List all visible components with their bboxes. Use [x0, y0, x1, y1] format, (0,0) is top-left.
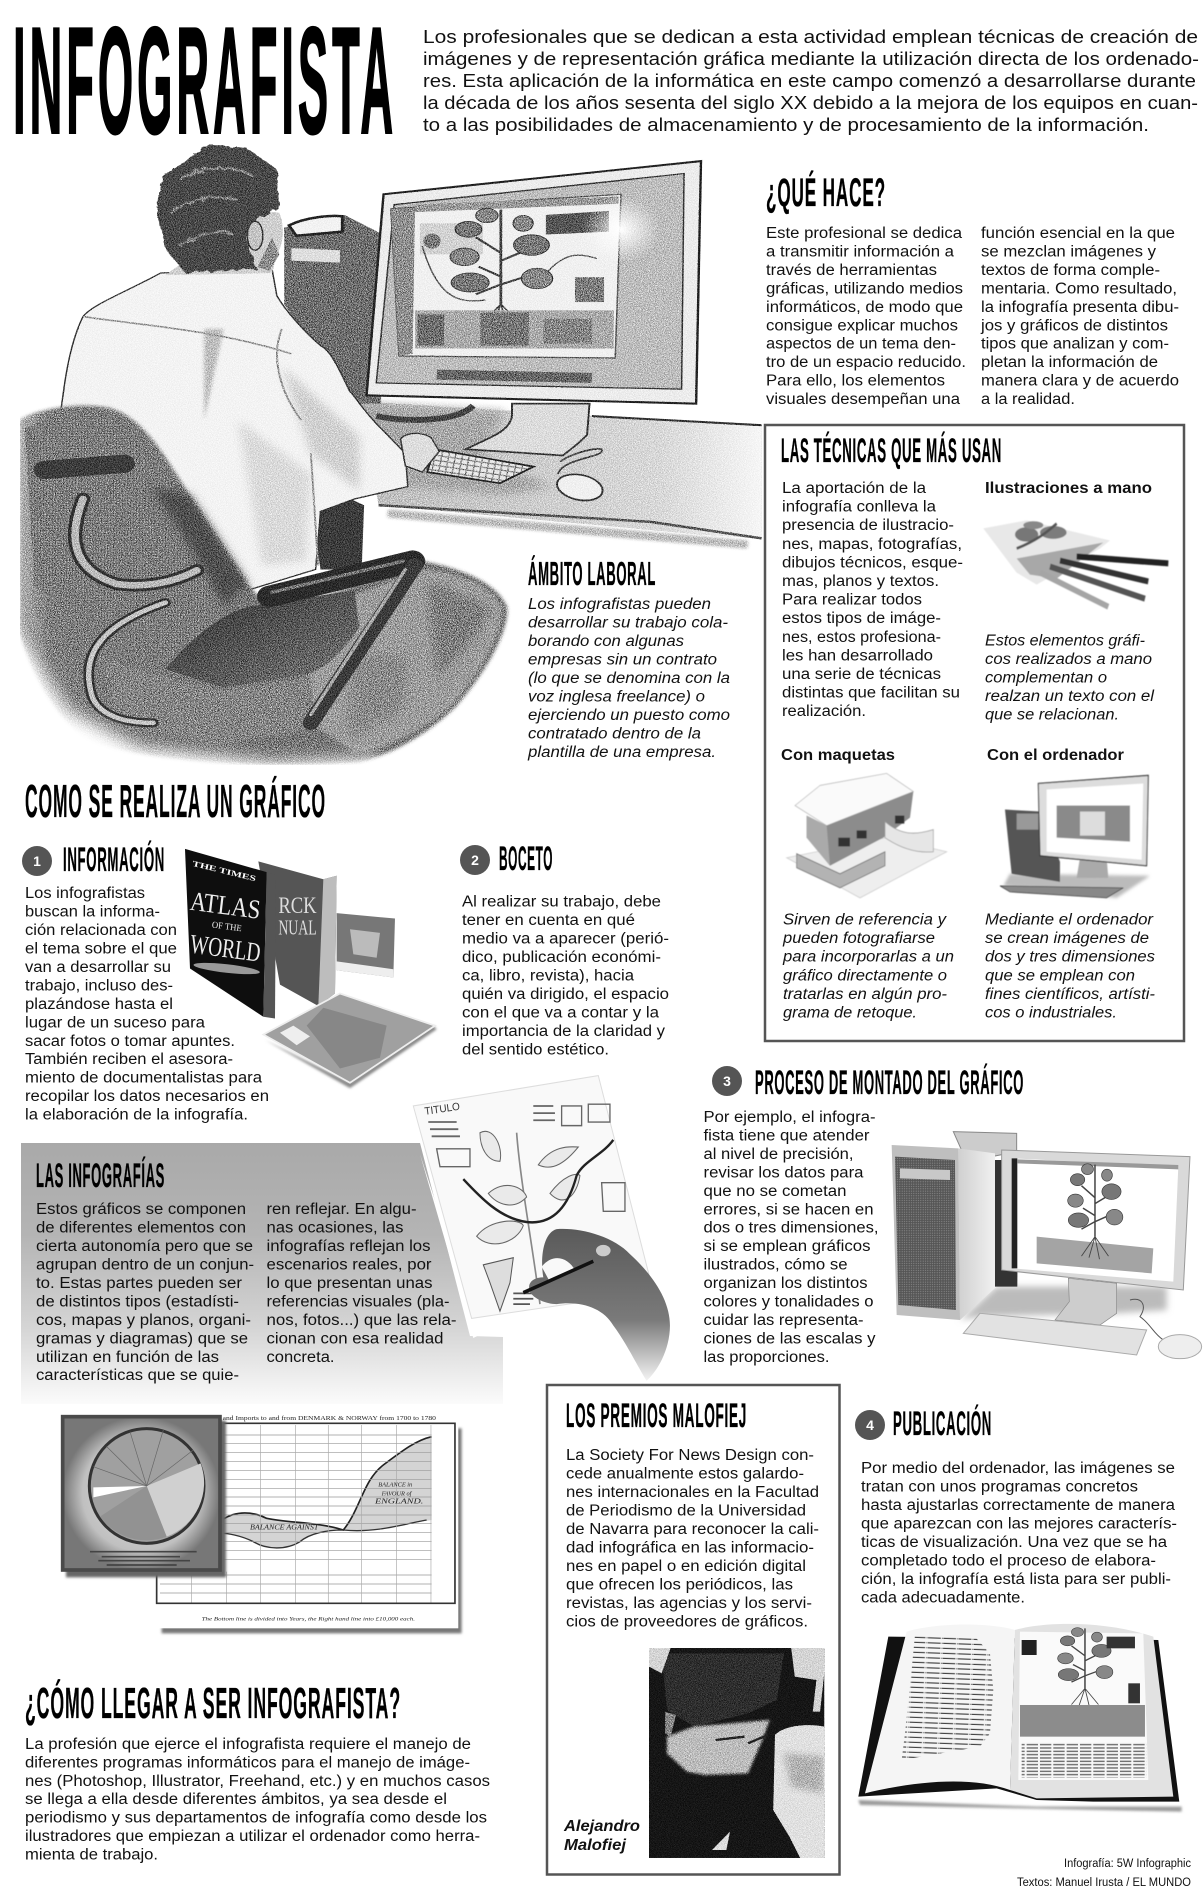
text: con el ordenador: dos y tres dimensiones	[985, 949, 1155, 966]
text block: que hace: función esencial en la que	[981, 225, 1175, 242]
text: las infografias: nos, fotos...) que las rela-	[266, 1312, 456, 1329]
book: manual: RCK	[278, 893, 317, 918]
text: las infografias: cierta autonomía pero que se	[36, 1238, 253, 1255]
step 3 text: errores, si se hacen en	[704, 1201, 874, 1218]
man head	[157, 145, 283, 275]
text: las infografias	[36, 1201, 456, 1384]
text: como llegar a ser infografista: nes (Photoshop, Illustrator, Freehand, etc.) y en muchos casos	[25, 1773, 490, 1790]
step 1 number	[22, 846, 52, 876]
text: las infografias: to. Estas partes pueden ser	[36, 1275, 242, 1292]
text: las infografias: cionan con esa realidad	[266, 1330, 444, 1348]
step 1 text: ción relacionada con	[25, 922, 177, 939]
text: tecnicas intro: nes, mapas, fotografías,	[782, 536, 962, 553]
text: los premios malofiej: La Society For News Design con-	[566, 1447, 814, 1464]
text: las infografias: gramas y diagramas) que se	[36, 1330, 248, 1348]
text: ¿CÓMO LLEGAR A SER INFOGRAFISTA?	[25, 1678, 401, 1728]
step 1 text: Los infografistas	[25, 885, 145, 902]
text: ambito laboral: contratado dentro de la	[528, 726, 701, 742]
text: las infografias: concreta.	[266, 1349, 334, 1366]
text: las infografias: de diferentes elementos con	[36, 1220, 246, 1236]
text: ilustraciones a mano: cos realizados a mano	[985, 651, 1152, 668]
illustration: man working at computer	[0, 145, 762, 793]
text: los premios malofiej	[566, 1447, 819, 1630]
intro text: res. Esta aplicación de la informática en este campo comenzó a desarrollarse durante	[423, 71, 1196, 91]
step 3 text: si se emplean gráficos	[704, 1238, 871, 1255]
text: como llegar a ser infografista: se llega a ella desde diferentes ámbitos, ya sea desde el	[25, 1791, 447, 1808]
text block: que hace: la infografía presenta dibu-	[981, 299, 1179, 316]
step 4 text: Por medio del ordenador, las imágenes se	[861, 1460, 1175, 1477]
text: como llegar a ser infografista: diferentes programas informáticos para el manejo de imáge-	[25, 1754, 470, 1771]
step 4 text: hasta ajustarlas correctamente de manera	[861, 1497, 1175, 1514]
text block: que hace: mentaria. Como resultado,	[981, 280, 1177, 297]
step 1 text	[25, 885, 269, 1124]
step 1 text: buscan la informa-	[25, 904, 160, 920]
text: tecnicas intro: dibujos técnicos, esque-	[782, 554, 963, 571]
step 2 text: dico, publicación económi-	[462, 949, 661, 966]
step 1 text: sacar fotos o tomar apuntes.	[25, 1033, 235, 1050]
text: las infografias: infografías reflejan los	[266, 1238, 431, 1255]
step 1 text: la elaboración de la infografía.	[25, 1107, 248, 1124]
textured drawing	[20, 145, 762, 765]
text: con el ordenador: fines científicos, artísti-	[985, 986, 1155, 1003]
step 2 text: tener en cuenta en qué	[462, 912, 635, 929]
text: tecnicas intro: La aportación de la	[782, 480, 926, 497]
step 1 text: trabajo, incluso des-	[25, 977, 173, 994]
photo caption: Malofiej	[564, 1837, 627, 1854]
image: books and map	[185, 849, 437, 1088]
brochure	[337, 913, 395, 977]
text: tecnicas intro: Para realizar todos	[782, 592, 922, 609]
text: los premios malofiej: cios de proveedores de gráficos.	[566, 1614, 808, 1630]
text: las infografias: agrupan dentro de un conjun-	[36, 1256, 254, 1274]
panel: las tecnicas que mas usan	[765, 425, 1184, 1041]
step 1 text: plazándose hasta el	[25, 996, 173, 1013]
image: sketch sheet and hand	[413, 1076, 670, 1381]
text: como llegar a ser infografista: La profesión que ejerce el infografista requiere el manejo de	[25, 1736, 471, 1753]
text block: que hace: textos de forma comple-	[981, 262, 1160, 279]
text block: que hace: se mezclan imágenes y	[981, 244, 1156, 260]
text: las infografias: de distintos tipos (estadísti-	[36, 1294, 239, 1310]
text: con maquetas: pueden fotografiarse	[782, 930, 935, 947]
step 1 text: lugar de un suceso para	[25, 1014, 205, 1031]
sketch paper	[413, 1076, 653, 1338]
photo caption: Alejandro	[563, 1818, 640, 1835]
step 1 text: miento de documentalistas para	[25, 1070, 262, 1087]
step 1 text: recopilar los datos necesarios en	[25, 1088, 269, 1105]
text: con el ordenador: cos o industriales.	[985, 1004, 1117, 1022]
step 3 text: al nivel de precisión,	[704, 1146, 854, 1163]
step 2 text: del sentido estético.	[462, 1042, 609, 1058]
step 2 number	[460, 845, 490, 875]
book: atlas of the world: ATLAS	[189, 886, 262, 925]
text block: que hace	[766, 225, 1179, 408]
book: atlas of the world: OF THE	[211, 919, 243, 933]
step 4 number: 4	[866, 1417, 874, 1433]
text: ambito laboral: Los infografistas pueden	[528, 596, 711, 613]
text: ambito laboral: ejerciendo un puesto como	[528, 707, 730, 724]
text block: que hace: Para ello, los elementos	[766, 373, 945, 390]
left page	[865, 1625, 1015, 1793]
step 1 text: van a desarrollar su	[25, 959, 171, 976]
text: ambito laboral: borando con algunas	[528, 633, 684, 650]
text block: que hace: a transmitir información a	[766, 244, 954, 260]
chart: playfair trade balance	[63, 1415, 462, 1633]
text: las infografias: utilizan en función de las	[36, 1349, 219, 1366]
text: tecnicas intro: nes, estos profesiona-	[782, 629, 941, 646]
step 2 text: con el que va a contar y la	[462, 1004, 659, 1022]
text: ambito laboral: plantilla de una empresa.	[527, 744, 716, 761]
step 3 text: organizan los distintos	[704, 1275, 868, 1292]
mouse	[554, 449, 606, 505]
text block: que hace: visuales desempeñan una	[766, 391, 960, 408]
text: como llegar a ser infografista: periodismo y sus departamentos de infografía como desde los	[25, 1810, 487, 1827]
hand with pen	[523, 1229, 670, 1381]
panel: ambito laboral: ÁMBITO LABORAL	[528, 555, 656, 592]
book: atlas of the world: WORLD	[189, 929, 262, 968]
text: ilustraciones a mano	[985, 632, 1155, 724]
text: tecnicas intro: mas, planos y textos.	[782, 573, 939, 590]
panel: las infografias	[21, 1143, 503, 1404]
hand	[400, 433, 439, 472]
step 3 text: cuidar las representa-	[704, 1312, 864, 1329]
text: ambito laboral: (lo que se denomina con la	[528, 670, 730, 687]
text: ambito laboral	[527, 596, 730, 761]
text block: que hace: informáticos, de modo que	[766, 299, 963, 316]
text: las infografias: referencias visuales (pla-	[266, 1294, 450, 1310]
text: las infografias: nas ocasiones, las	[266, 1220, 404, 1236]
tower	[892, 1132, 1018, 1320]
text: con el ordenador: que se emplean con	[985, 967, 1135, 984]
step 3 text: Por ejemplo, el infogra-	[704, 1109, 876, 1126]
image: open book	[858, 1624, 1182, 1812]
text: tecnicas intro: realización.	[782, 703, 866, 720]
text: ambito laboral: voz inglesa freelance) o	[528, 688, 705, 706]
text: COMO SE REALIZA UN GRÁFICO	[25, 775, 326, 827]
step 1 number: 1	[33, 853, 41, 869]
book: manual	[258, 861, 337, 1006]
subheading: con el ordenador: Con el ordenador	[987, 747, 1124, 764]
image: architectural model	[787, 773, 947, 898]
book cover	[858, 1637, 1179, 1802]
text: ambito laboral: empresas sin un contrato	[528, 652, 717, 668]
text: BOCETO	[499, 840, 553, 878]
text block: que hace: manera clara y de acuerdo	[981, 373, 1179, 390]
chart shadow	[162, 1428, 462, 1633]
panel: ambito laboral	[527, 555, 730, 761]
text: las infografias: ren reflejar. En algu-	[266, 1201, 416, 1218]
intro text: imágenes y de representación gráfica mediante la utilización directa de los ordenado-	[423, 49, 1199, 69]
keyboard	[427, 449, 534, 483]
text: tecnicas intro: estos tipos de imáge-	[782, 610, 941, 627]
chair and trousers	[20, 406, 507, 765]
text: como llegar a ser infografista: mienta de trabajo.	[25, 1846, 158, 1863]
text: los premios malofiej: nes internacionales en la Facultad	[566, 1484, 819, 1501]
image: computer with illustrator box	[1000, 775, 1150, 898]
text block: que hace: a la realidad.	[981, 391, 1075, 408]
under-desk shadow	[306, 478, 364, 569]
text: con maquetas: Sirven de referencia y	[783, 912, 947, 928]
text: los premios malofiej: de Navarra para reconocer la cali-	[566, 1521, 819, 1538]
chair fade-outs	[0, 607, 408, 793]
text block: que hace: pletan la información de	[981, 354, 1158, 371]
intro text: Los profesionales que se dedican a esta actividad emplean técnicas de creación de	[423, 27, 1198, 47]
mouse and cable	[1130, 1299, 1202, 1359]
text: ilustraciones a mano: Estos elementos gráfi-	[985, 632, 1145, 650]
step 2 number: 2	[471, 852, 479, 868]
computer tower	[284, 215, 381, 404]
text block: que hace: Este profesional se dedica	[766, 225, 962, 242]
text: ilustraciones a mano: realzan un texto con el	[985, 688, 1155, 705]
text block: que hace: tipos que analizan y com-	[981, 336, 1169, 353]
chair arm rests	[44, 464, 415, 723]
sketch paper: TITULO	[424, 1101, 461, 1118]
step 3 number	[712, 1066, 742, 1096]
step 4 text: que aparezcan con las mejores caracterís-	[861, 1516, 1177, 1532]
panel: las infografias: LAS INFOGRAFÍAS	[36, 1157, 165, 1195]
step 4 text: cada adecuadamente.	[861, 1590, 1025, 1606]
text: con el ordenador	[985, 912, 1155, 1022]
right page	[1010, 1624, 1173, 1798]
intro text	[423, 27, 1199, 135]
step 2 text: quién va dirigido, el espacio	[462, 986, 669, 1003]
text: ambito laboral: desarrollar su trabajo cola-	[528, 614, 728, 632]
text: los premios malofiej: cede anualmente estos galardo-	[566, 1466, 804, 1482]
folded map	[263, 994, 437, 1088]
text: tecnicas intro: una serie de técnicas	[782, 666, 941, 683]
text: las infografias: características que se quie-	[36, 1367, 239, 1384]
text: ilustraciones a mano: complementan o	[985, 670, 1107, 686]
line chart: and Imports to and from DENMARK & NORWAY from 1700 to 1780	[223, 1415, 436, 1422]
text: tecnicas intro: presencia de ilustracio-	[782, 517, 954, 534]
step 2 text	[462, 894, 669, 1058]
step 4 text: tratan con unos programas concretos	[861, 1478, 1138, 1496]
text: tecnicas intro: infografía conlleva la	[782, 499, 936, 516]
desk shadow	[960, 1287, 1167, 1320]
text: con el ordenador: Mediante el ordenador	[985, 912, 1154, 928]
book shadow	[858, 1800, 1182, 1812]
text block: que hace: tro de un espacio reducido.	[766, 354, 966, 371]
text: las infografias: cos, mapas y planos, organi-	[36, 1312, 251, 1329]
text: con maquetas: gráfico directamente o	[783, 967, 947, 984]
text: ilustraciones a mano: que se relacionan.	[985, 706, 1119, 724]
panel: los premios malofiej	[547, 1385, 840, 1874]
step 2 text: importancia de la claridad y	[462, 1023, 665, 1040]
monitor	[1002, 1150, 1190, 1325]
text: INFORMACIÓN	[63, 841, 165, 879]
line chart: The Bottom line is divided into Years, the Right hand line into £10,000 each.	[202, 1617, 415, 1623]
book: atlas of the world: THE TIMES	[192, 859, 257, 883]
text block: que hace: través de herramientas	[766, 262, 937, 279]
text: los premios malofiej: que ofrecen los periódicos, las	[566, 1576, 793, 1594]
step 3 text: ilustrados, cómo se	[704, 1257, 848, 1274]
text: ¿QUÉ HACE?	[766, 170, 886, 215]
text block: que hace: jos y gráficos de distintos	[980, 317, 1168, 334]
step 2 text: Al realizar su trabajo, debe	[462, 894, 661, 910]
step 1 text: el tema sobre el que	[25, 940, 177, 957]
text: PUBLICACIÓN	[893, 1405, 992, 1443]
text: con maquetas	[782, 912, 954, 1022]
text: las infografias: Estos gráficos se componen	[36, 1201, 246, 1218]
text: con maquetas: grama de retoque.	[783, 1004, 917, 1022]
subheading: con maquetas: Con maquetas	[781, 747, 895, 764]
intro text: to a las posibilidades de almacenamiento y de procesamiento de la información.	[423, 115, 1149, 135]
photo: alejandro malofiej	[649, 1648, 824, 1858]
line chart: ENGLAND.	[374, 1496, 424, 1505]
keyboard	[963, 1313, 1147, 1355]
step 2 text: ca, libro, revista), hacia	[462, 968, 634, 984]
line chart: BALANCE in	[378, 1482, 412, 1489]
step 3 text	[704, 1109, 878, 1366]
step 2 text: medio va a aparecer (perió-	[462, 930, 669, 948]
step 3 text: fista tiene que atender	[704, 1128, 870, 1144]
text: los premios malofiej: dad infográfica en las informacio-	[566, 1540, 814, 1556]
line chart	[155, 1415, 458, 1628]
text: los premios malofiej: revistas, las agencias y los servi-	[566, 1595, 812, 1612]
text: tecnicas intro: distintas que facilitan su	[782, 685, 960, 702]
text: como llegar a ser infografista	[25, 1736, 490, 1863]
text: los premios malofiej: nes en papel o en edición digital	[566, 1558, 806, 1575]
panel: los premios malofiej: LOS PREMIOS MALOFIEJ	[566, 1397, 747, 1435]
image: desktop computer	[892, 1132, 1202, 1359]
text: tecnicas intro: les han desarrollado	[782, 647, 933, 664]
man shirt	[59, 269, 408, 590]
text block: que hace: consigue explicar muchos	[766, 317, 958, 334]
text: con maquetas: para incorporarlas a un	[782, 949, 954, 966]
subheading: ilustraciones a mano: Ilustraciones a mano	[985, 480, 1152, 497]
line chart: FAVOUR of	[381, 1490, 413, 1497]
step 3 text: revisar los datos para	[704, 1164, 864, 1181]
desk	[359, 402, 762, 545]
step 3 text: colores y tonalidades o	[704, 1294, 874, 1310]
step 3 number: 3	[723, 1073, 731, 1089]
step 3 text: dos o tres dimensiones,	[704, 1220, 878, 1237]
step 1 text: También reciben el asesora-	[25, 1051, 233, 1068]
step 4 text: completado todo el proceso de elabora-	[861, 1552, 1156, 1570]
text: como llegar a ser infografista: ilustradores que empiezan a utilizar el ordenador como herra-	[25, 1828, 480, 1845]
book: manual: NUAL	[278, 917, 317, 940]
intro text: la década de los años sesenta del siglo XX debido a la mejora de los equipos en cuan-	[423, 93, 1198, 113]
text: los premios malofiej: de Periodismo de la Universidad	[566, 1502, 806, 1520]
text: con el ordenador: se crean imágenes de	[985, 930, 1149, 947]
text block: que hace: aspectos de un tema den-	[766, 336, 956, 353]
text block: que hace: gráficas, utilizando medios	[766, 280, 963, 297]
credits	[1017, 1858, 1191, 1889]
step 3 text: ciones de las escalas y	[704, 1330, 876, 1347]
step 3 text: las proporciones.	[704, 1349, 830, 1366]
image: pencils and drawing	[983, 520, 1168, 607]
step 4 text	[861, 1460, 1177, 1606]
step 4 text: ticas de visualización. Una vez que se ha	[861, 1534, 1167, 1551]
text: las infografias: escenarios reales, por	[266, 1256, 432, 1274]
text: las infografias: lo que presentan unas	[266, 1275, 433, 1292]
step 3 text: que no se cometan	[704, 1183, 846, 1200]
text: tecnicas intro	[782, 480, 963, 720]
credits: Infografía: 5W Infographic	[1064, 1858, 1191, 1870]
book: atlas of the world	[185, 849, 276, 1018]
credits: Textos: Manuel Irusta / EL MUNDO	[1017, 1877, 1191, 1889]
text: con maquetas: tratarlas en algún pro-	[783, 986, 947, 1003]
step 4 text: ción, la infografía está lista para ser publi-	[861, 1571, 1171, 1588]
photo caption	[563, 1818, 640, 1854]
line chart: BALANCE AGAINST	[250, 1522, 319, 1531]
step 4 number	[855, 1410, 885, 1440]
monitor	[367, 161, 701, 455]
plate with pie diagram	[63, 1417, 226, 1577]
